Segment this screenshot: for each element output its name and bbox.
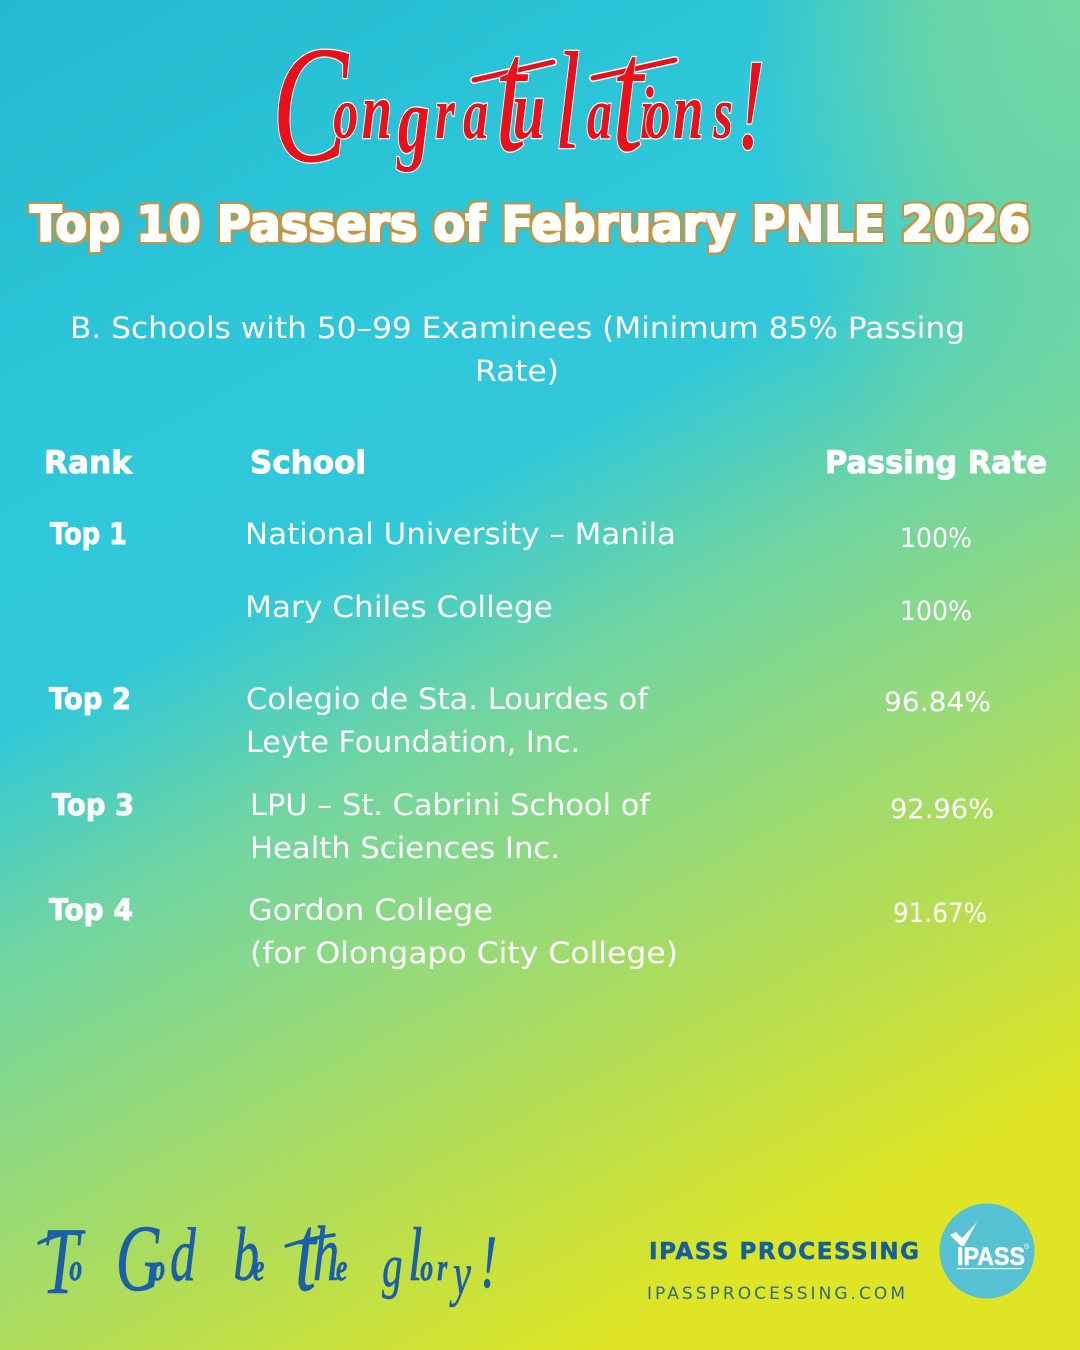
logo: IPASS badge bbox=[940, 1204, 1034, 1298]
script tagline: To God be the glory: o bbox=[152, 1247, 165, 1289]
row: Top 2 Colegio de Sta. Lourdes: 96.84% bbox=[884, 687, 991, 718]
registered mark: ® bbox=[1024, 1243, 1030, 1251]
row: Top 2 Colegio de Sta. Lourdes: Colegio de Sta. Lourdes of bbox=[246, 682, 649, 716]
script tagline: To God be the glory: h bbox=[313, 1212, 339, 1298]
script tagline: To God be the glory: G bbox=[116, 1206, 162, 1311]
script tagline: To God be the glory: g bbox=[382, 1233, 403, 1300]
row: Top 2 Colegio de Sta. Lourdes: Top 2 bbox=[49, 682, 131, 716]
script tagline: To God be the glory: b bbox=[233, 1213, 259, 1298]
row: Top 3 LPU: Health Sciences Inc. bbox=[250, 831, 560, 865]
script tagline: To God be the glory: ! bbox=[480, 1220, 497, 1303]
table header: Passing Rate bbox=[825, 445, 1047, 481]
row: Top 3 LPU: 92.96% bbox=[890, 794, 994, 825]
script heading: Congratulations: a bbox=[463, 73, 488, 154]
row: Top 2 Colegio de Sta. Lourdes bbox=[49, 682, 991, 759]
script heading: Congratulations: o bbox=[645, 73, 670, 154]
script heading: Congratulations: n bbox=[362, 67, 392, 156]
script heading: Congratulations: ! bbox=[736, 33, 765, 177]
row: Mary Chiles College bbox=[245, 590, 972, 627]
title: Top 10 Passers of February PNLE 2026 bbox=[30, 196, 1030, 253]
row: Top 1 National University bbox=[50, 517, 972, 554]
script heading: Congratulations: r bbox=[435, 73, 456, 154]
subtitle: B. Schools with 50–99 Examinees (Minimum 85% Passing bbox=[70, 311, 965, 345]
row: Top 3 LPU bbox=[52, 788, 994, 865]
script heading: Congratulations bbox=[272, 3, 765, 198]
script tagline: To God be the glory: e bbox=[253, 1247, 264, 1289]
script heading: Congratulations: l bbox=[554, 23, 581, 178]
row: Top 4 Gordon College: Gordon College bbox=[248, 893, 493, 927]
brand name: IPASS PROCESSING bbox=[649, 1239, 919, 1265]
row: Top 4 Gordon College bbox=[49, 893, 987, 970]
script tagline: To God be the glory: t bbox=[295, 1193, 318, 1315]
script heading: Congratulations: g bbox=[396, 69, 430, 173]
icon: check mark bbox=[950, 1222, 977, 1246]
website: IPASSPROCESSING.COM bbox=[647, 1284, 905, 1304]
script tagline: To God be the glory: e bbox=[336, 1247, 347, 1289]
script heading: Congratulations: u bbox=[513, 62, 545, 157]
row: Mary Chiles College: Mary Chiles College bbox=[245, 590, 553, 624]
script heading: Congratulations: C bbox=[272, 12, 350, 198]
row: Top 3 LPU: Top 3 bbox=[52, 788, 134, 822]
row: Top 1 National University: Top 1 bbox=[50, 517, 127, 551]
row: Top 4 Gordon College: Top 4 bbox=[49, 893, 133, 927]
script heading: Congratulations: n bbox=[673, 67, 703, 156]
script tagline: To God be the glory: o bbox=[69, 1247, 82, 1289]
script heading: Congratulations: a bbox=[587, 73, 612, 154]
script heading: Congratulations: t bbox=[612, 3, 646, 186]
script tagline: To God be the glory: l bbox=[408, 1213, 422, 1298]
row: Top 1 National University: 100% bbox=[900, 523, 972, 554]
row: Top 1 National University: National University – Manila bbox=[245, 517, 676, 551]
row: Top 4 Gordon College: 91.67% bbox=[893, 898, 987, 929]
script heading: Congratulations: t bbox=[495, 3, 529, 186]
script heading: Congratulations: i bbox=[640, 73, 654, 154]
script tagline: To God be the glory: o bbox=[420, 1247, 433, 1289]
row: Mary Chiles College: 100% bbox=[900, 596, 972, 627]
subtitle bbox=[70, 311, 965, 388]
script tagline: To God be the glory: r bbox=[437, 1247, 448, 1289]
table header: School bbox=[250, 445, 366, 481]
script tagline: To God be the glory: y bbox=[449, 1241, 471, 1308]
script tagline: To God be the glory: T bbox=[42, 1209, 82, 1314]
row: Top 3 LPU: LPU – St. Cabrini School of bbox=[250, 788, 651, 822]
row: Top 4 Gordon College: (for Olongapo City College) bbox=[250, 936, 678, 970]
script tagline: To God be the glory bbox=[39, 1193, 497, 1315]
row: Top 2 Colegio de Sta. Lourdes: Leyte Foundation, Inc. bbox=[246, 725, 580, 759]
script heading: Congratulations: s bbox=[713, 73, 733, 154]
logo wordmark: IPASS bbox=[957, 1243, 1025, 1271]
table header: Rank bbox=[44, 445, 133, 481]
subtitle: Rate) bbox=[475, 354, 559, 388]
script tagline: To God be the glory: d bbox=[170, 1213, 196, 1298]
table header bbox=[44, 445, 1047, 481]
script heading: Congratulations: o bbox=[333, 73, 358, 154]
